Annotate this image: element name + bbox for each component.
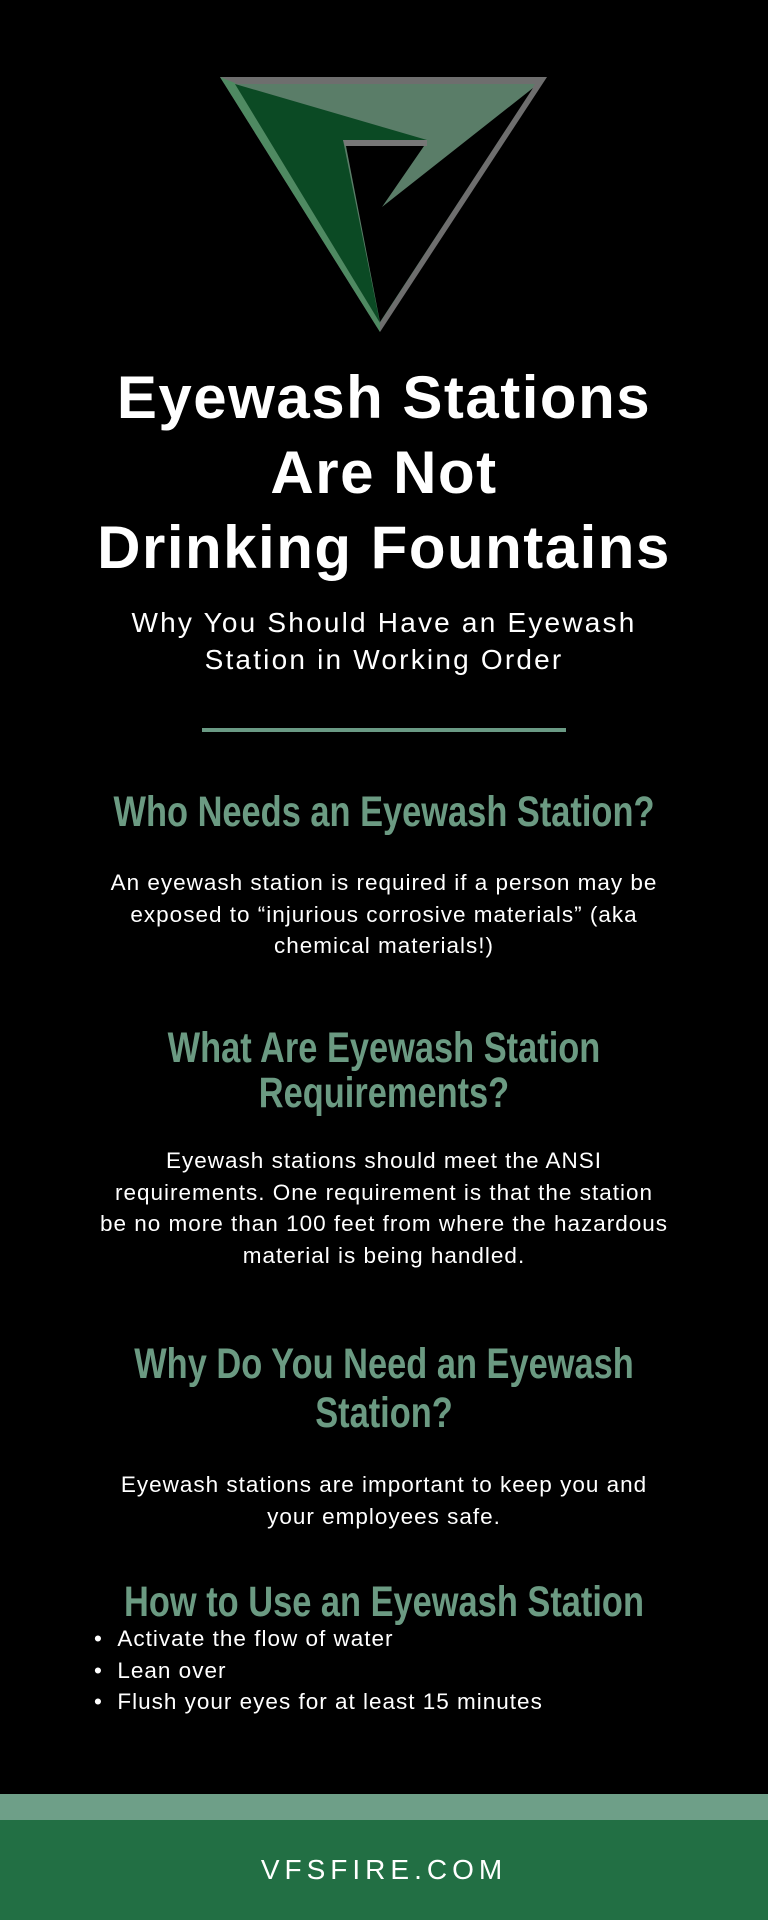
subtitle: Why You Should Have an Eyewash xyxy=(132,607,636,638)
text: why: Eyewash stations are important to keep you and xyxy=(121,1472,647,1497)
title: Are Not xyxy=(270,439,498,506)
heading: why: Station? xyxy=(315,1389,453,1437)
bullet list xyxy=(94,1626,543,1714)
bullet list: • Flush your eyes for at least 15 minutes xyxy=(94,1689,543,1714)
title: Drinking Fountains xyxy=(97,514,671,581)
subtitle: Station in Working Order xyxy=(205,644,563,675)
heading: requirements: What Are Eyewash Station xyxy=(168,1024,600,1072)
bullet list: • Activate the flow of water xyxy=(94,1626,394,1651)
heading: how: How to Use an Eyewash Station xyxy=(124,1578,644,1626)
footer xyxy=(0,1820,768,1920)
subtitle xyxy=(132,607,636,675)
heading: requirements xyxy=(168,1024,600,1117)
text: requirements: material is being handled. xyxy=(243,1242,525,1268)
text: why: your employees safe. xyxy=(267,1504,501,1528)
divider xyxy=(202,728,566,732)
logo xyxy=(220,77,547,332)
text: who needs xyxy=(110,870,657,958)
title xyxy=(97,364,671,581)
title: Eyewash Stations xyxy=(117,364,651,431)
heading: why xyxy=(134,1340,634,1437)
bullet list: • Lean over xyxy=(94,1658,226,1682)
footer band light xyxy=(0,1794,768,1820)
heading: requirements: Requirements? xyxy=(259,1069,509,1117)
text: requirements xyxy=(100,1148,668,1268)
text: requirements: be no more than 100 feet from where the hazardous xyxy=(100,1211,668,1236)
text: why xyxy=(121,1472,647,1528)
text: who needs: An eyewash station is required if a person may be xyxy=(111,870,657,895)
text: who needs: exposed to “injurious corrosive materials” (aka xyxy=(130,902,638,926)
text: requirements: Eyewash stations should meet the ANSI xyxy=(166,1148,602,1173)
footer text: VFSFIRE.COM xyxy=(261,1854,507,1885)
heading: who needs: Who Needs an Eyewash Station? xyxy=(114,788,654,836)
heading: why: Why Do You Need an Eyewash xyxy=(134,1340,634,1388)
text: who needs: chemical materials!) xyxy=(274,933,494,958)
text: requirements: requirements. One requirement is that the station xyxy=(115,1180,653,1204)
